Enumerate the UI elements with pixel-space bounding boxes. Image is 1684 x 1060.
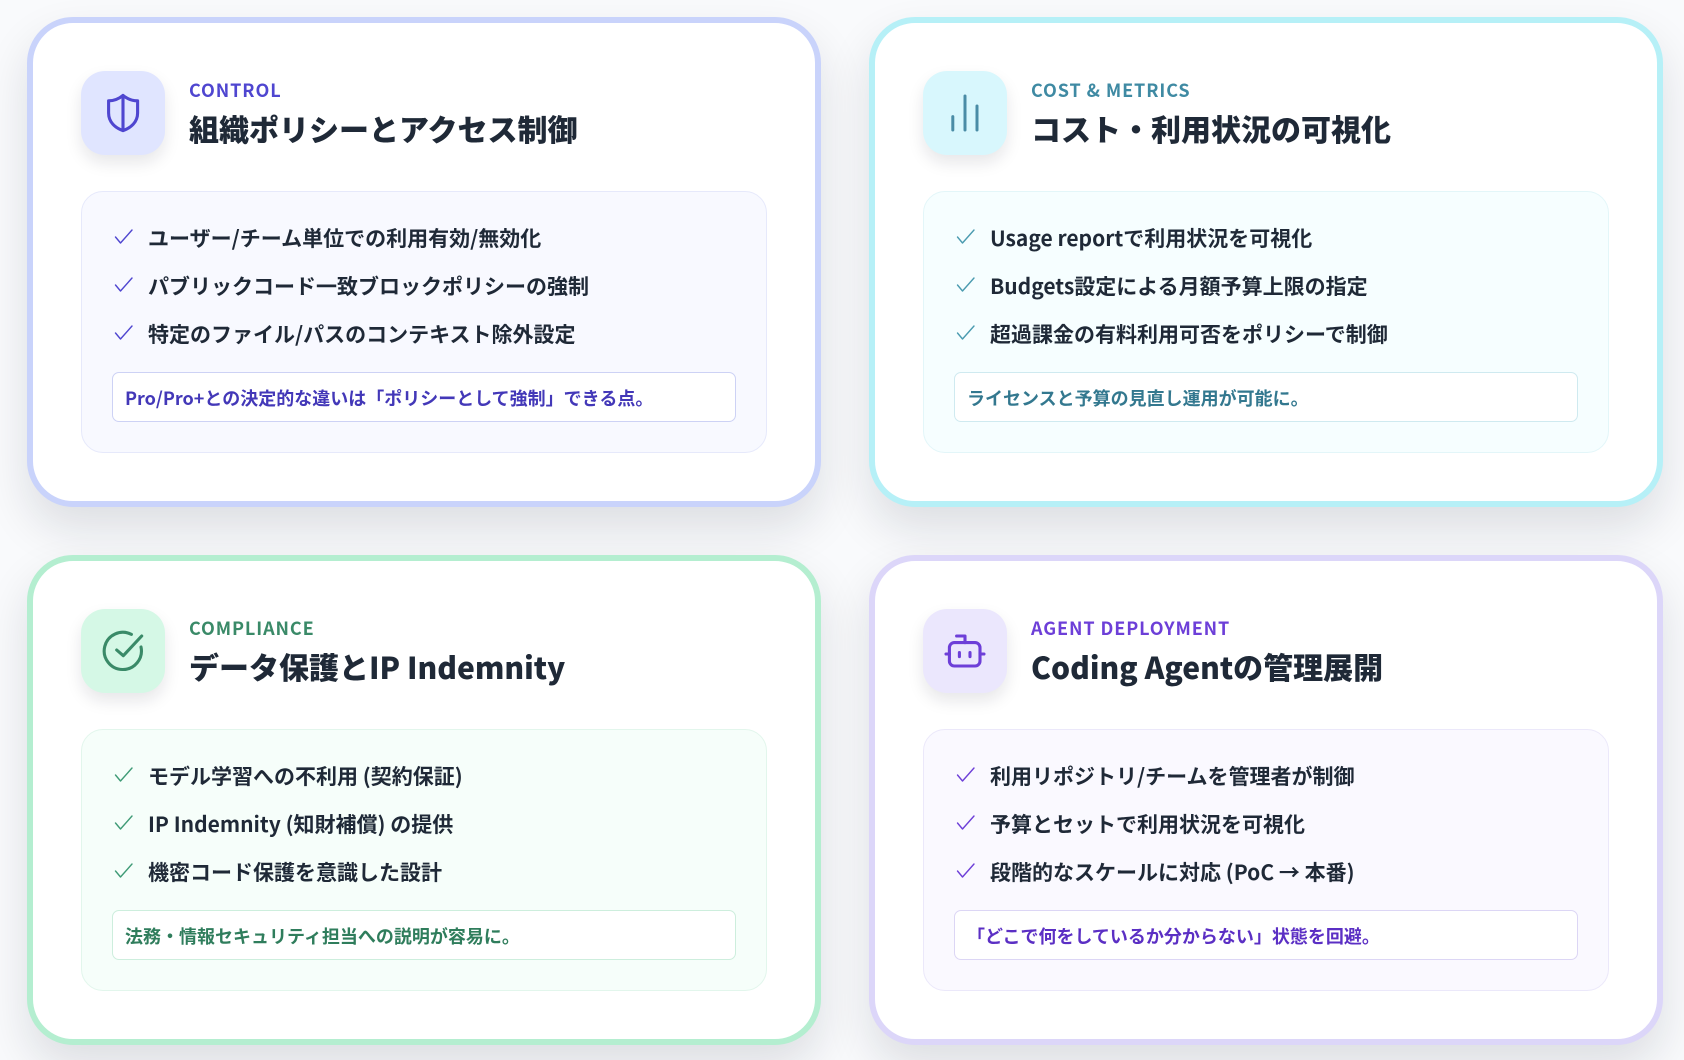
heading: control: 組織ポリシーとアクセス制御 [189,106,578,150]
panel: compliance list [81,729,767,991]
list item 2: パブリックコード一致ブロックポリシーの強制 [148,271,589,301]
eyebrow: agent deployment: AGENT DEPLOYMENT [1031,615,1230,641]
list item 3: 段階的なスケールに対応 (PoC → 本番) [990,857,1355,887]
eyebrow: control: CONTROL [189,77,282,103]
eyebrow: cost and metrics: COST & METRICS [1031,77,1190,103]
panel: compliance card [27,555,821,1045]
callout [112,372,736,422]
panel: control list [81,191,767,453]
icon: robot [923,609,1007,693]
list item 1: ユーザー/チーム単位での利用有効/無効化 [148,223,541,253]
heading: agent deployment: Coding Agentの管理展開 [1031,644,1383,688]
panel: control card [27,17,821,507]
icon: check circle [81,609,165,693]
panel: agent deployment card [869,555,1663,1045]
panel: agent list [923,729,1609,991]
callout: ライセンスと予算の見直し運用が可能に。 [967,385,1309,411]
list item 2: 予算とセットで利用状況を可視化 [990,809,1305,839]
heading: compliance: データ保護とIP Indemnity [189,644,565,688]
callout [954,910,1578,960]
callout: 法務・情報セキュリティ担当への説明が容易に。 [125,923,520,949]
list item 3: 特定のファイル/パスのコンテキスト除外設定 [148,319,576,349]
eyebrow: compliance: COMPLIANCE [189,615,315,641]
panel: cost and metrics card [869,17,1663,507]
callout: Pro/Pro+との決定的な違いは「ポリシーとして強制」できる点。 [125,385,653,411]
callout: 「どこで何をしているか分からない」状態を回避。 [967,923,1380,949]
list item 2: Budgets設定による月額予算上限の指定 [990,271,1368,301]
list item 2: IP Indemnity (知財補償) の提供 [148,809,453,839]
panel: cost list [923,191,1609,453]
icon: shield [81,71,165,155]
list item 1: 利用リポジトリ/チームを管理者が制御 [990,761,1354,791]
list item 3: 超過課金の有料利用可否をポリシーで制御 [990,319,1388,349]
list item 3: 機密コード保護を意識した設計 [148,857,442,887]
callout [954,372,1578,422]
callout [112,910,736,960]
icon: bar chart [923,71,1007,155]
heading: cost and metrics: コスト・利用状況の可視化 [1031,106,1391,150]
list item 1: Usage reportで利用状況を可視化 [990,223,1312,253]
list item 1: モデル学習への不利用 (契約保証) [148,761,463,791]
